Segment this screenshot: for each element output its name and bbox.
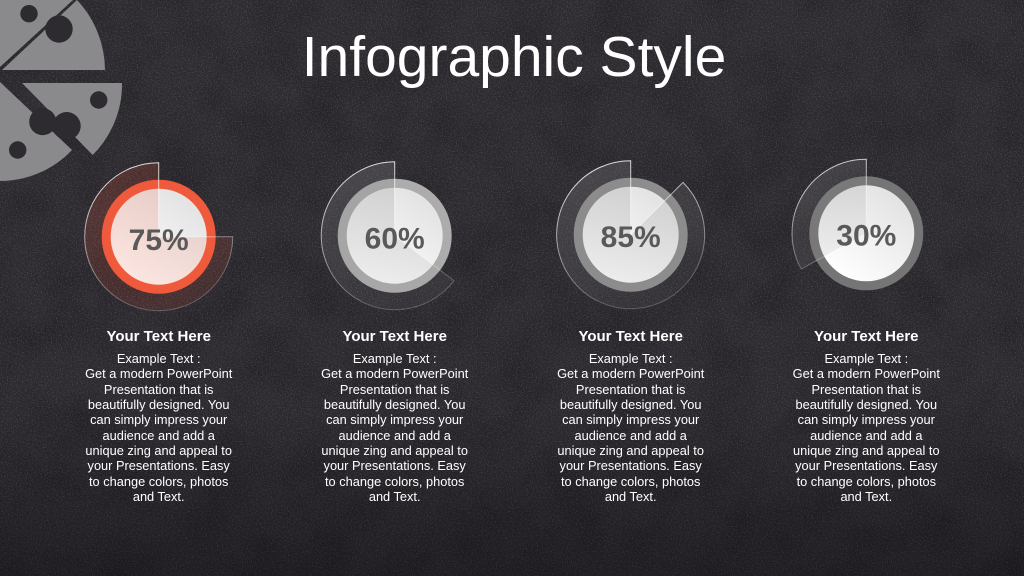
text block: column 3: to change colors, photos — [561, 474, 700, 489]
text block: column 1: Example Text : — [117, 351, 201, 366]
text block: column 3: can simply impress your — [562, 412, 699, 427]
text block: column 2: unique zing and appeal to — [321, 443, 468, 458]
title: Infographic Style — [302, 25, 726, 89]
text block: column 3: and Text. — [605, 489, 657, 504]
text block: column 4: and Text. — [840, 489, 892, 504]
text block: column 2: Get a modern PowerPoint — [321, 366, 468, 381]
text block: column 3: unique zing and appeal to — [557, 443, 704, 458]
chart: 75% ring — [85, 163, 233, 311]
text block: column 1: audience and add a — [102, 428, 215, 443]
text block: column 2: can simply impress your — [326, 412, 463, 427]
text block: column 4: unique zing and appeal to — [793, 443, 940, 458]
text block: column 1: Get a modern PowerPoint — [85, 366, 232, 381]
text block: column 4: Your Text Here — [814, 328, 919, 345]
text block: column 1: unique zing and appeal to — [85, 443, 232, 458]
text block: column 1: to change colors, photos — [89, 474, 228, 489]
label: 75%: 75% — [129, 224, 189, 257]
text block: column 1: Presentation that is — [104, 382, 213, 397]
text block: column 2: to change colors, photos — [325, 474, 464, 489]
text block: column 3: Presentation that is — [576, 382, 685, 397]
text block: column 4: beautifully designed. You — [795, 397, 937, 412]
text block: column 1 — [85, 328, 232, 504]
text block: column 4 — [793, 328, 940, 504]
text block: column 2: Example Text : — [353, 351, 437, 366]
text block: column 1: Your Text Here — [106, 328, 211, 345]
text block: column 4: your Presentations. Easy — [795, 458, 937, 473]
text block: column 2: Presentation that is — [340, 382, 449, 397]
text block: column 4: audience and add a — [810, 428, 923, 443]
text block: column 2: your Presentations. Easy — [324, 458, 466, 473]
text block: column 4: Example Text : — [824, 351, 908, 366]
text block: column 4: can simply impress your — [798, 412, 935, 427]
label: 85%: 85% — [601, 221, 661, 254]
text block: column 2: Your Text Here — [342, 328, 447, 345]
text block: column 3: audience and add a — [574, 428, 687, 443]
chart: 30% ring — [792, 159, 923, 290]
icon: pizza slices — [0, 0, 122, 181]
text block: column 1: and Text. — [133, 489, 185, 504]
text block: column 2: beautifully designed. You — [324, 397, 465, 412]
text block: column 3: beautifully designed. You — [560, 397, 701, 412]
text block: column 3: Your Text Here — [578, 328, 683, 345]
text block: column 4: to change colors, photos — [797, 474, 936, 489]
text block: column 4: Get a modern PowerPoint — [793, 366, 940, 381]
chart: 60% ring — [321, 162, 454, 310]
label: 30%: 30% — [836, 220, 896, 252]
text block: column 3: Get a modern PowerPoint — [557, 366, 704, 381]
text block: column 2: and Text. — [369, 489, 421, 504]
text block: column 3: your Presentations. Easy — [560, 458, 702, 473]
text block: column 1: beautifully designed. You — [88, 397, 229, 412]
chart: 85% ring — [557, 161, 705, 309]
text block: column 3: Example Text : — [589, 351, 673, 366]
text block: column 2 — [321, 328, 468, 504]
text block: column 1: your Presentations. Easy — [88, 458, 230, 473]
text block: column 1: can simply impress your — [90, 412, 227, 427]
text block: column 4: Presentation that is — [812, 382, 921, 397]
text block: column 2: audience and add a — [338, 428, 451, 443]
label: 60%: 60% — [365, 222, 425, 256]
text block: column 3 — [557, 328, 704, 504]
